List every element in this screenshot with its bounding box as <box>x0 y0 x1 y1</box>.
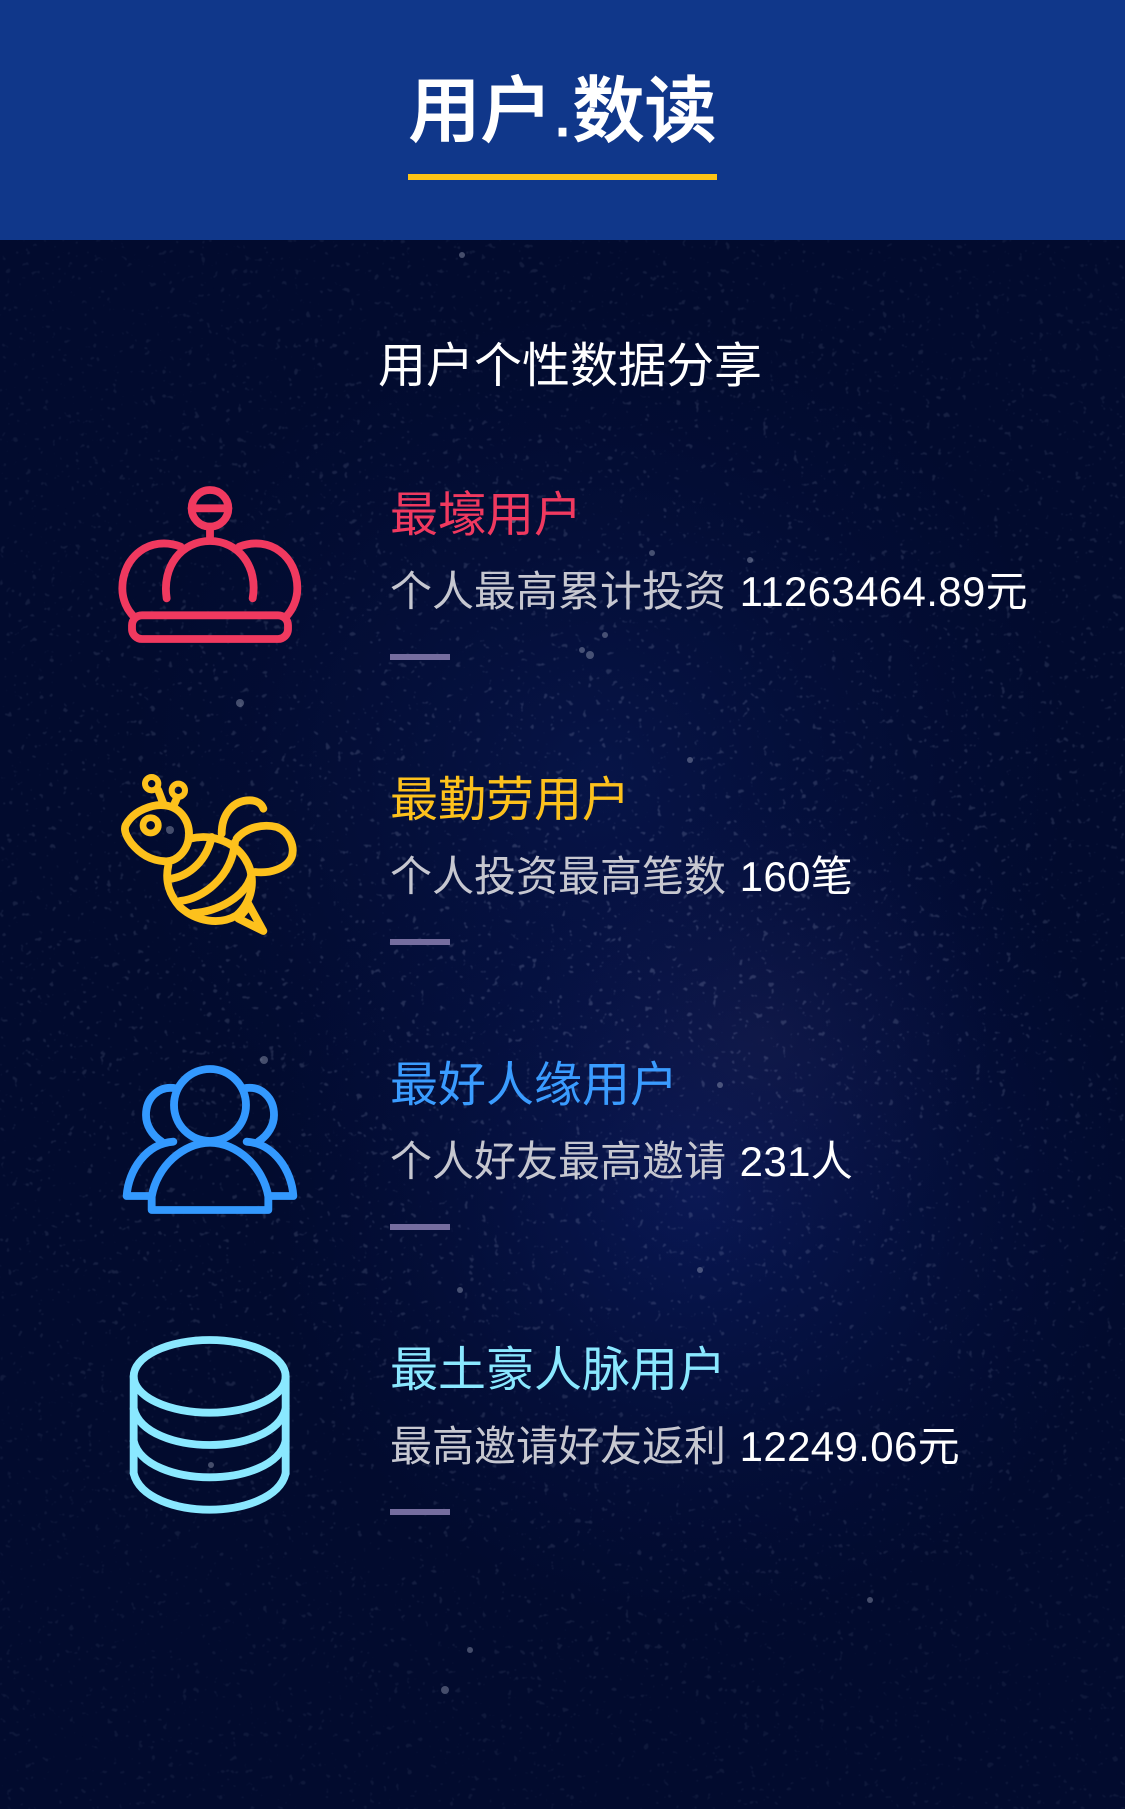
icon: people <box>122 1065 298 1214</box>
icon: bee <box>121 774 297 935</box>
divider <box>390 654 450 660</box>
row: hardest working user <box>121 774 853 945</box>
stat text: 最高邀请好友返利 12249.06元 <box>390 1423 960 1470</box>
icon: database <box>130 1336 290 1514</box>
heading: 最勤劳用户 <box>390 774 630 827</box>
title: 用户.数读 <box>408 72 716 152</box>
divider <box>390 1509 450 1515</box>
header band <box>0 0 1125 240</box>
row: richest network user <box>130 1336 960 1515</box>
row: most popular user <box>122 1059 853 1230</box>
heading: 最壕用户 <box>390 489 582 542</box>
heading: 最好人缘用户 <box>390 1059 678 1112</box>
divider <box>390 1224 450 1230</box>
icon: crown <box>118 486 302 643</box>
heading: 最土豪人脉用户 <box>390 1344 726 1397</box>
divider <box>390 939 450 945</box>
subtitle: 用户个性数据分享 <box>378 340 762 393</box>
row: wealthiest user <box>118 486 1028 660</box>
stat text: 个人投资最高笔数 160笔 <box>390 853 853 900</box>
stat text: 个人好友最高邀请 231人 <box>390 1138 853 1185</box>
stat text: 个人最高累计投资 11263464.89元 <box>390 568 1028 615</box>
title underline <box>408 174 717 180</box>
